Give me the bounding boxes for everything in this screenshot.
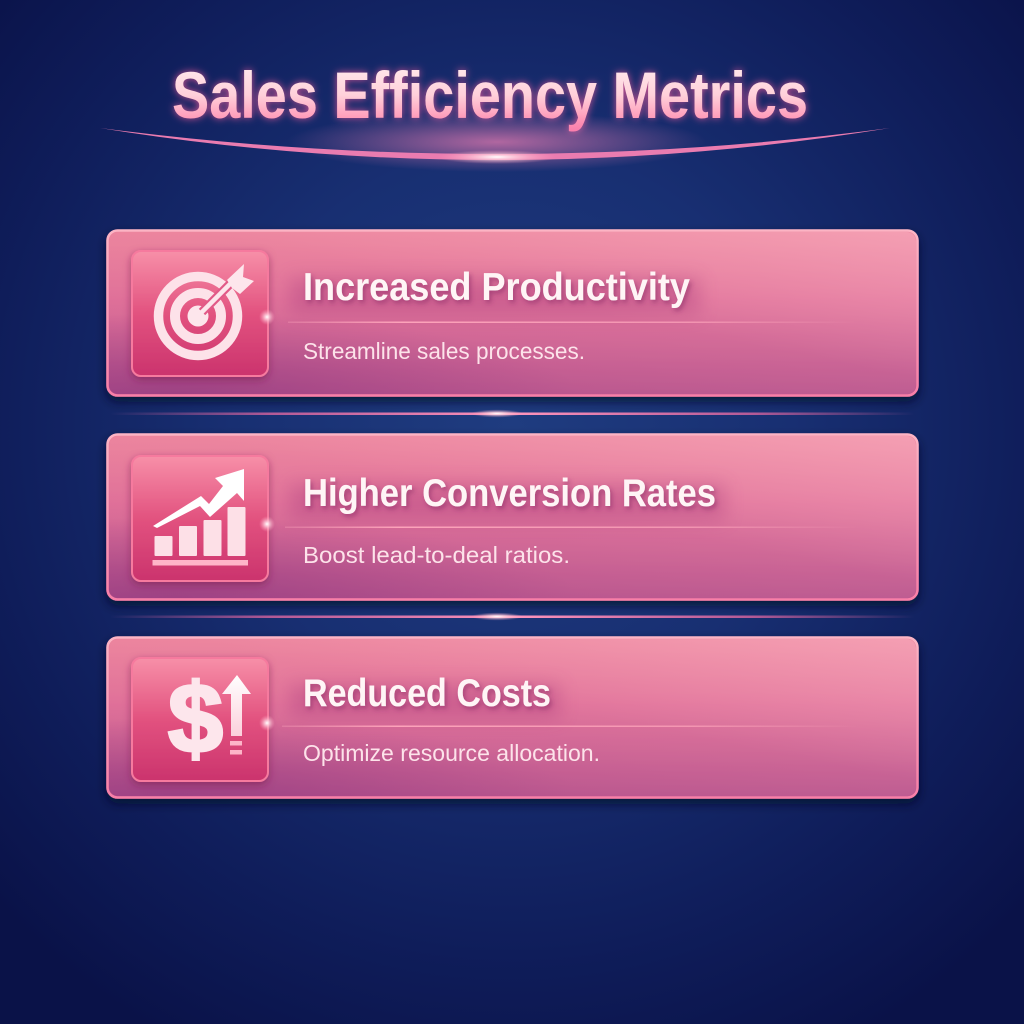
- divider: [288, 322, 858, 323]
- panel: increased productivity: [108, 230, 918, 396]
- heading: Reduced Costs: [303, 672, 551, 715]
- icon: bar chart with arrow: [132, 456, 268, 581]
- heading: Increased Productivity: [303, 266, 690, 309]
- divider: [285, 526, 860, 528]
- panel: reduced costs: [108, 638, 918, 798]
- heading: Higher Conversion Rates: [303, 472, 716, 515]
- description: Boost lead-to-deal ratios.: [303, 542, 570, 568]
- separator 2: [110, 612, 915, 620]
- icon: dollar with up arrow: [132, 658, 268, 781]
- title: Sales Efficiency Metrics: [172, 58, 808, 132]
- title glowing arc: [100, 112, 890, 172]
- description: Optimize resource allocation.: [303, 740, 600, 766]
- icon sparkle: [259, 715, 275, 731]
- divider: [282, 726, 860, 727]
- separator 1: [110, 410, 915, 418]
- description: Streamline sales processes.: [303, 338, 585, 364]
- icon sparkle: [259, 309, 275, 325]
- icon: target with arrow: [132, 251, 268, 376]
- icon sparkle: [259, 516, 275, 532]
- panel: higher conversion rates: [108, 434, 918, 600]
- icon: dollar with up arrow: $: [168, 663, 223, 773]
